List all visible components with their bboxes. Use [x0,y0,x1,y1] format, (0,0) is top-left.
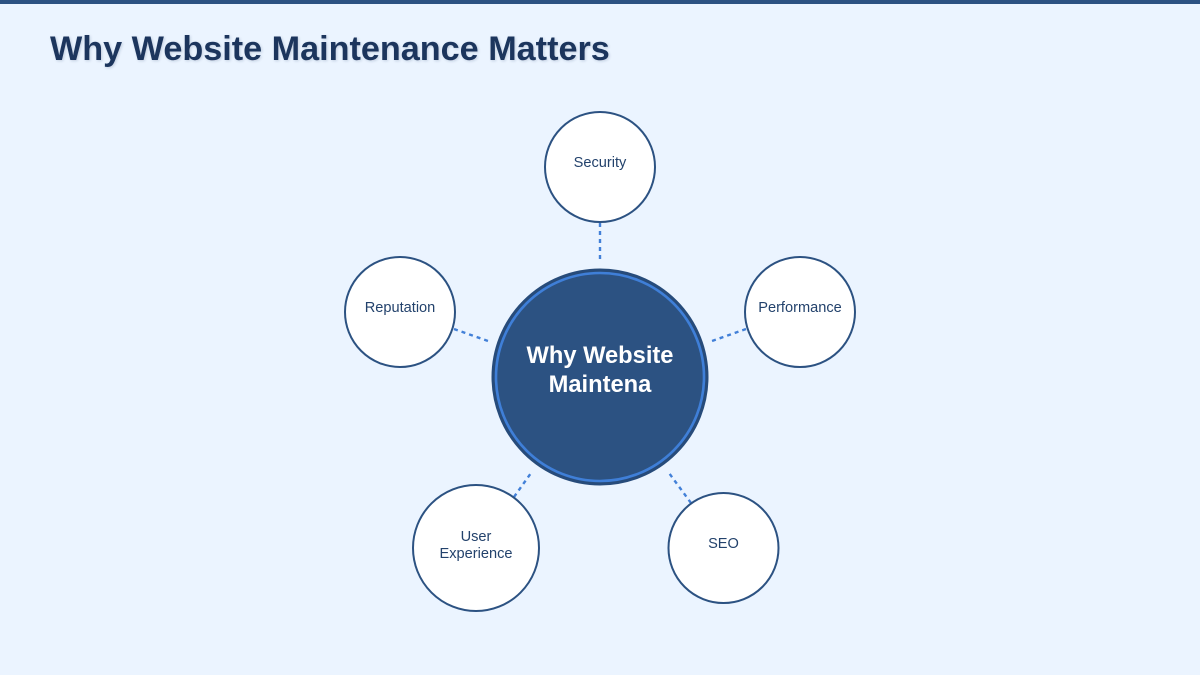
node: reputation [345,257,455,367]
node: seo [668,493,778,603]
node: user experience: Experience [439,546,513,562]
node: performance: Performance [758,300,842,316]
connector: reputation [454,329,488,341]
central hub [493,270,707,484]
top accent bar [0,0,1200,4]
node: performance [745,257,855,367]
connector: performance [712,329,746,341]
node: user experience: User [461,529,492,545]
central hub: Why Website [527,343,673,369]
connector: user experience [514,473,531,497]
title: Why Website Maintenance Matters [50,30,610,68]
connector: seo [669,473,691,503]
central hub: Maintena [549,372,652,398]
connector: security [599,223,601,260]
node: security: Security [574,155,627,171]
node: security [545,112,655,222]
node: user experience [413,485,539,611]
node: seo: SEO [708,536,739,552]
node: reputation: Reputation [365,300,435,316]
